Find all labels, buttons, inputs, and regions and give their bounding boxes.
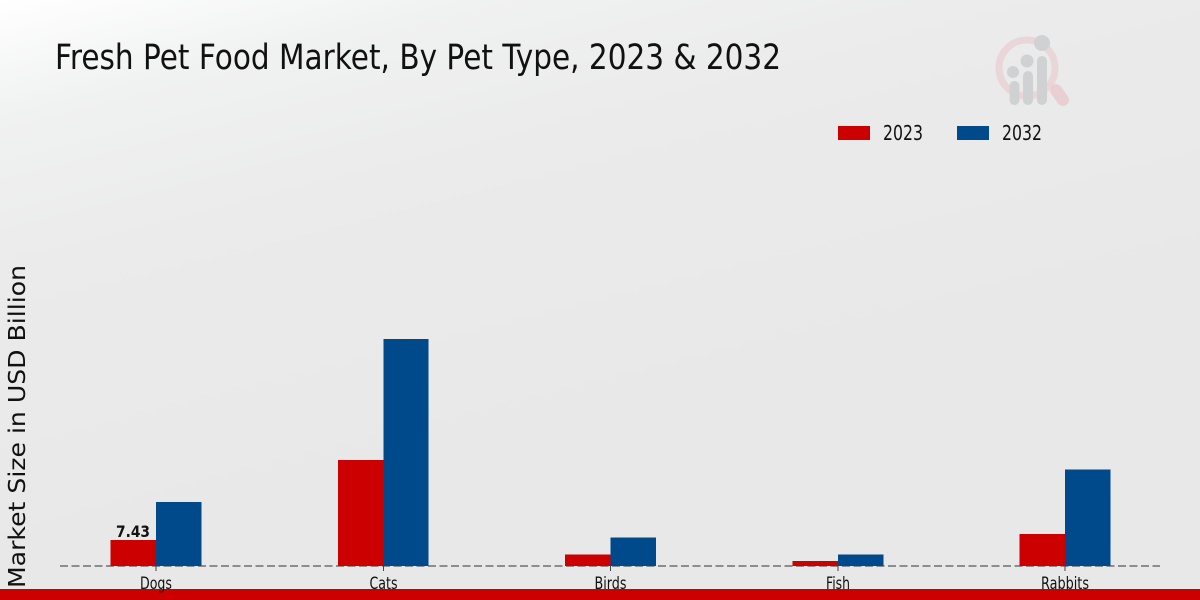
tick marks: [156, 566, 1065, 571]
bars: Birds: [565, 538, 656, 566]
bar chart: [60, 339, 1160, 594]
x axis labels: Dogs: [140, 574, 172, 594]
bars: Dogs: [110, 502, 202, 566]
x axis labels: Rabbits: [1041, 574, 1089, 594]
x axis labels: [140, 574, 1089, 594]
baseline: [60, 565, 1160, 567]
x axis labels: Birds: [594, 574, 627, 594]
legend item: 2023: [838, 121, 923, 145]
x axis labels: Fish: [826, 574, 850, 594]
y axis label: Market Size in USD Billion: [5, 265, 31, 588]
bars: Cats: [338, 339, 428, 566]
icon: watermark logo: [999, 35, 1063, 105]
legend: [838, 121, 1042, 145]
x axis labels: Cats: [370, 574, 398, 594]
legend item: 2032: [957, 121, 1042, 145]
data label: Dogs 2023: 7.43: [116, 522, 150, 541]
title: Fresh Pet Food Market, By Pet Type, 2023 & 2032: [55, 38, 781, 78]
bars: Fish: [792, 554, 884, 566]
footer bar: [0, 589, 1200, 600]
legend item: 2023: 2023: [883, 121, 923, 145]
legend item: 2032: 2032: [1002, 121, 1042, 145]
bars: Rabbits: [1020, 470, 1110, 566]
